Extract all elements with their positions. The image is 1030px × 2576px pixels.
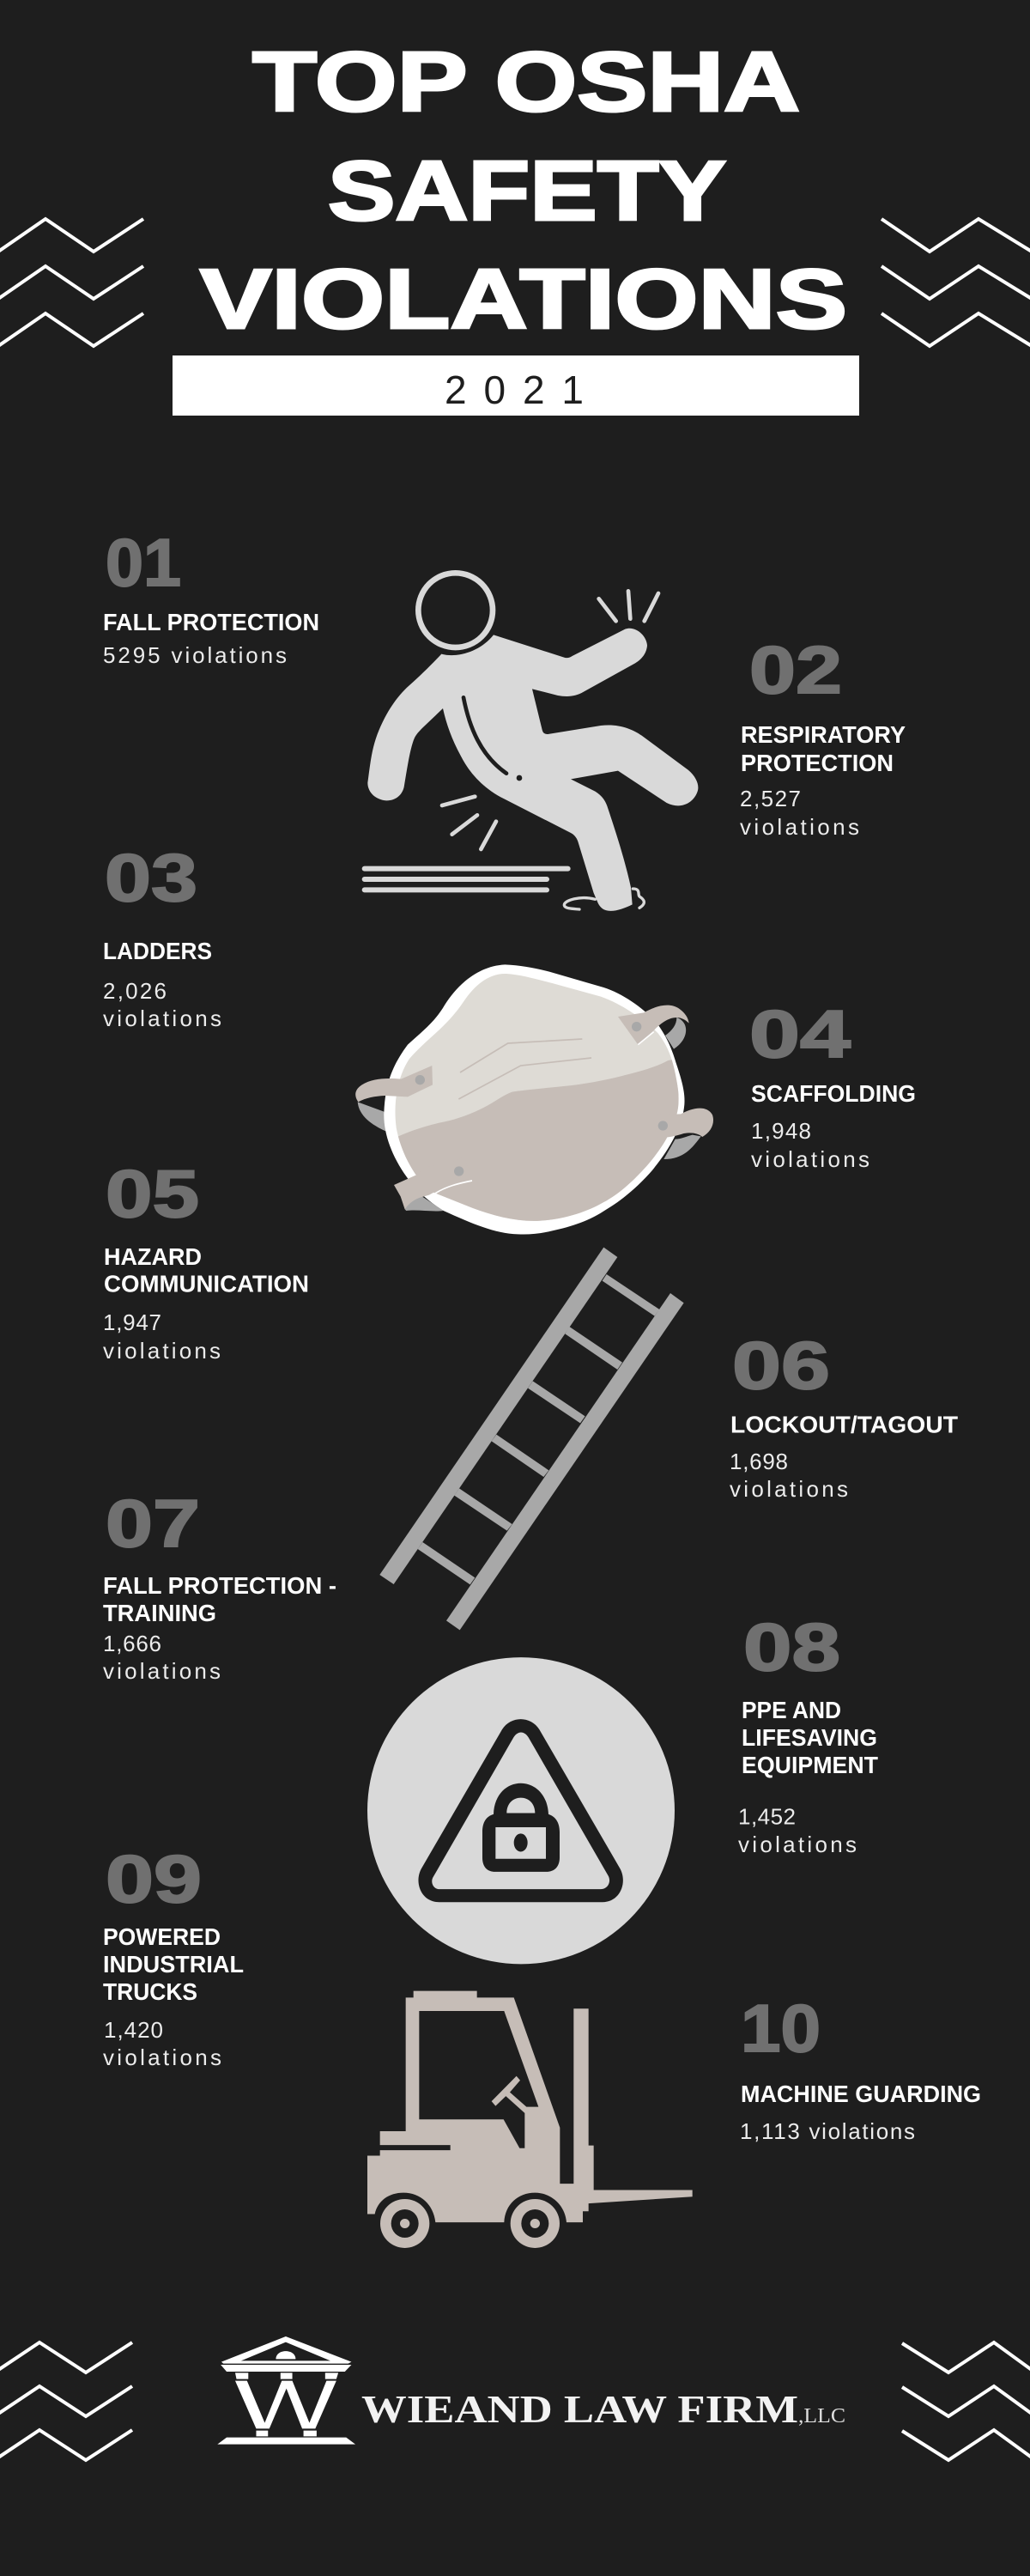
item 03: LADDERS [103, 938, 212, 964]
item 03: violations [103, 1005, 221, 1031]
title [200, 34, 847, 346]
item 05 [103, 1156, 309, 1364]
item 08: PPE AND [742, 1697, 841, 1723]
zigzag decoration: top left [0, 219, 143, 346]
item 08: EQUIPMENT [742, 1752, 878, 1778]
item 01: 01 [106, 525, 181, 600]
item 09: 1,420 [104, 2017, 163, 2043]
item 09: TRUCKS [103, 1978, 197, 2005]
item 09: 09 [106, 1841, 202, 1917]
zigzag decoration: top right [882, 219, 1030, 346]
item 06: 06 [732, 1327, 830, 1403]
item 04: 04 [749, 996, 851, 1072]
item 05: violations [103, 1338, 221, 1364]
item 01: 5295 violations [103, 642, 287, 668]
item 09: POWERED [103, 1923, 221, 1950]
item 03: 2,026 [103, 978, 167, 1004]
year banner: 2021 [445, 368, 584, 412]
logo: temple W emblem [217, 2336, 355, 2445]
item 07: FALL PROTECTION - [103, 1572, 336, 1599]
item 02: violations [740, 814, 859, 840]
item 08: 08 [743, 1609, 840, 1685]
item 04: violations [751, 1146, 869, 1172]
item 10 [740, 1990, 981, 2144]
item 07: 07 [106, 1485, 200, 1561]
item 04: 1,948 [751, 1118, 811, 1144]
item 04: SCAFFOLDING [751, 1080, 916, 1107]
item 10: MACHINE GUARDING [741, 2081, 981, 2107]
item 05: COMMUNICATION [104, 1271, 309, 1297]
item 06: 1,698 [730, 1449, 788, 1474]
icon: respirator mask [355, 959, 713, 1234]
item 01: FALL PROTECTION [103, 609, 319, 635]
item 08: 1,452 [738, 1803, 796, 1829]
item 01 [103, 525, 319, 668]
item 02 [740, 632, 906, 840]
item 05: 05 [106, 1156, 199, 1231]
icon: forklift [367, 1991, 693, 2248]
icon: lockout warning triangle with padlock [367, 1657, 675, 1964]
item 02: 02 [749, 632, 842, 708]
item 07: violations [103, 1658, 221, 1684]
item 09: INDUSTRIAL [103, 1951, 244, 1978]
title: VIOLATIONS [200, 252, 847, 346]
item 08: violations [738, 1832, 857, 1857]
item 04 [749, 996, 916, 1172]
item 07: TRAINING [103, 1600, 216, 1626]
item 08 [738, 1609, 878, 1857]
item 03: 03 [105, 840, 197, 915]
item 09 [103, 1841, 244, 2070]
icon: ladder [379, 1248, 684, 1630]
title: TOP OSHA [252, 34, 800, 129]
item 06: LOCKOUT/TAGOUT [730, 1412, 958, 1437]
zigzag decoration: bottom left [0, 2342, 132, 2460]
item 06 [730, 1327, 958, 1502]
logo: firm name: ,LLC [798, 2405, 845, 2427]
logo: firm name: WIEAND LAW FIRM [361, 2387, 798, 2431]
zigzag decoration: bottom right [902, 2342, 1030, 2460]
year banner [173, 355, 859, 416]
item 10: 10 [741, 1990, 821, 2066]
item 02: PROTECTION [741, 750, 894, 776]
item 05: HAZARD [104, 1243, 202, 1270]
item 05: 1,947 [103, 1309, 161, 1335]
icon: person slipping and falling [365, 573, 698, 911]
item 02: 2,527 [740, 786, 801, 811]
item 08: LIFESAVING [742, 1724, 877, 1751]
item 10: 1,113 violations [740, 2118, 915, 2144]
item 03 [103, 840, 221, 1031]
title: SAFETY [328, 143, 726, 238]
item 09: violations [103, 2044, 221, 2070]
item 02: RESPIRATORY [741, 721, 906, 748]
item 07: 1,666 [103, 1631, 161, 1656]
item 07 [103, 1485, 336, 1684]
item 06: violations [730, 1476, 848, 1502]
